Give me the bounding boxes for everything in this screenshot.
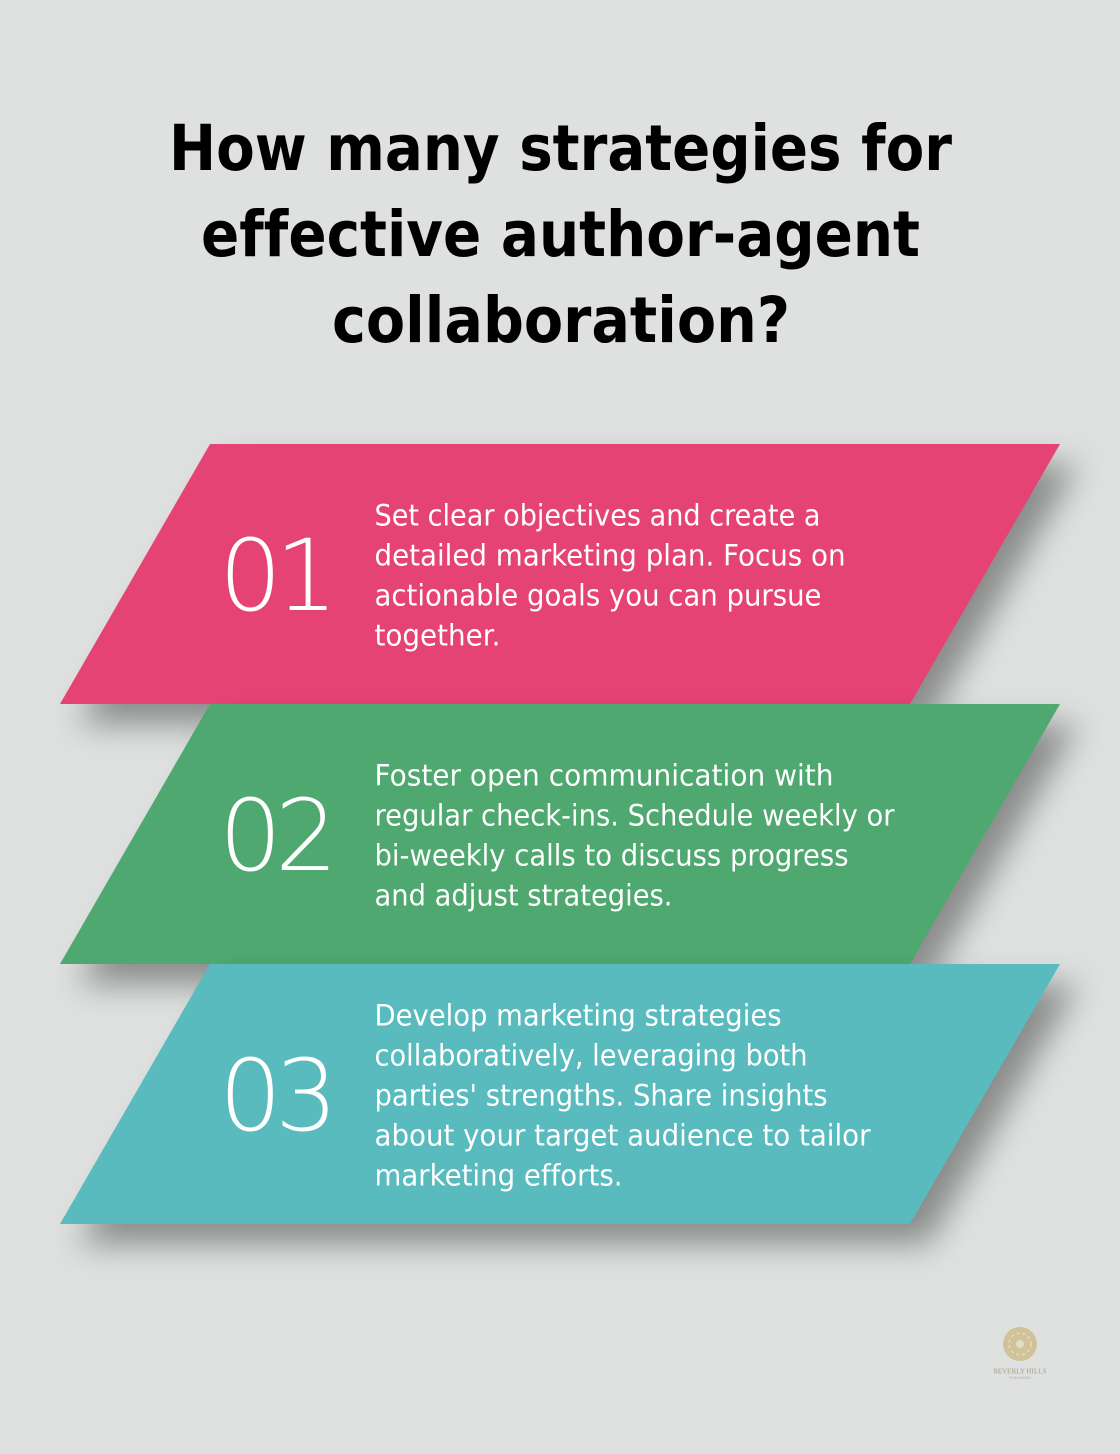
- title: collaboration?: [332, 284, 790, 357]
- text: step 01: Set clear objectives and create a: [374, 498, 820, 532]
- text: step 02: bi-weekly calls to discuss progress: [374, 838, 848, 872]
- number 01: 01: [219, 519, 338, 634]
- text: step 03: collaboratively, leveraging both: [374, 1038, 808, 1072]
- panel: step 02: [60, 704, 1078, 984]
- logo: Beverly Hills Publishing: [994, 1327, 1046, 1380]
- text: step 01: together.: [374, 618, 500, 652]
- text: step 03: parties' strengths. Share insights: [374, 1078, 828, 1112]
- text: step 02: regular check-ins. Schedule weekly or: [374, 798, 895, 832]
- title: How many strategies for: [169, 112, 952, 185]
- logo: Beverly Hills Publishing: PUBLISHING: [1009, 1376, 1031, 1380]
- panel: step 01: [60, 444, 1078, 724]
- number 02: 02: [219, 779, 338, 894]
- title: [169, 112, 952, 357]
- title: effective author-agent: [201, 198, 920, 271]
- text: step 03: marketing efforts.: [374, 1158, 622, 1192]
- logo: Beverly Hills Publishing: BEVERLY HILLS: [994, 1366, 1046, 1376]
- text: step 03: about your target audience to tailor: [374, 1118, 871, 1152]
- text: step 03: Develop marketing strategies: [374, 998, 782, 1032]
- text: step 01: detailed marketing plan. Focus on: [374, 538, 846, 572]
- text: step 02: and adjust strategies.: [374, 878, 672, 912]
- panel: step 03: [60, 964, 1078, 1244]
- text: step 01: [374, 498, 846, 652]
- text: step 02: [374, 758, 895, 912]
- text: step 02: Foster open communication with: [374, 758, 834, 792]
- text: step 03: [374, 998, 871, 1192]
- number 03: 03: [219, 1039, 338, 1154]
- text: step 01: actionable goals you can pursue: [374, 578, 822, 612]
